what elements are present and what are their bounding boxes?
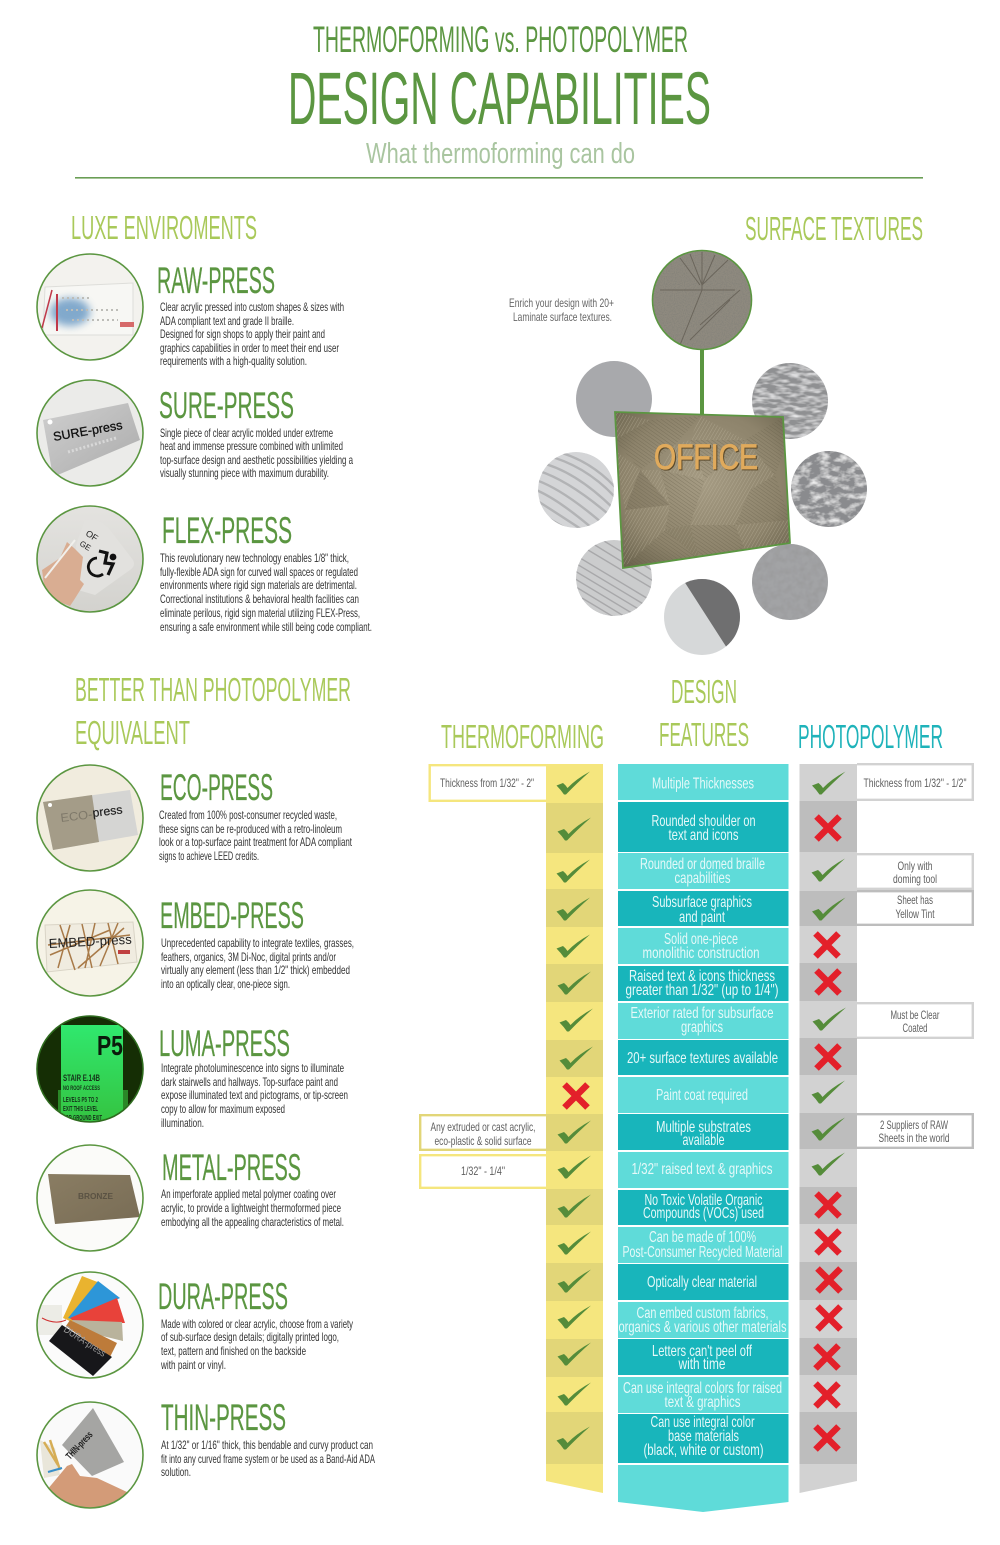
description: embed-press: virtually any element (less than 1/2" thick) embedded xyxy=(161,963,350,977)
name: metal-press: METAL-PRESS xyxy=(162,1147,301,1188)
check: subsurface graphics xyxy=(556,898,590,920)
feature: domed braille xyxy=(618,853,788,889)
description: embed-press: feathers, organics, 3M Di-Noc, digital prints and/or xyxy=(161,950,336,964)
callout: raw suppliers xyxy=(857,1114,973,1148)
feature: raised text thickness: Raised text & icons thickness xyxy=(629,968,775,985)
description: sure-press: visually stunning piece with maximum durability. xyxy=(160,466,329,480)
description: eco-press: look or a top-surface paint treatment for ADA compliant xyxy=(159,835,352,849)
feature: raised text thickness: greater than 1/32" (up to 1/4") xyxy=(626,982,778,999)
callout: thermoforming substrates: eco-plastic & solid surface xyxy=(434,1134,532,1148)
description: metal-press: acrylic, to provide a lightweight thermoformed piece xyxy=(161,1201,341,1215)
cross: integral colors xyxy=(816,1384,838,1406)
cross: one-piece xyxy=(816,934,838,956)
description: sure-press: Single piece of clear acrylic molded under extreme xyxy=(160,426,333,440)
check: multiple thicknesses xyxy=(556,772,590,794)
photo: embed-press xyxy=(36,890,144,998)
description: eco-press: these signs can be re-produced with a retro-linoleum xyxy=(159,822,342,836)
feature: raised graphics: 1/32" raised text & graphics xyxy=(632,1161,772,1178)
description: embed-press: Unprecedented capability to integrate textiles, grasses, xyxy=(161,936,354,950)
sign lettering: OFFICE xyxy=(654,438,758,477)
feature: recycled xyxy=(618,1227,788,1263)
callout: yellow tint: Sheet has xyxy=(897,893,933,907)
sign lettering shadow: OFFICE xyxy=(655,439,759,478)
check: rounded shoulder xyxy=(558,818,591,840)
column heading: design features xyxy=(659,673,749,753)
description: dura-press: Made with colored or clear acrylic, choose from a variety xyxy=(161,1317,353,1331)
feature: recycled: Post-Consumer Recycled Material xyxy=(622,1244,782,1261)
check: subsurface graphics xyxy=(812,898,846,920)
photo: luma-press: LEVELS P5 TO 2 xyxy=(63,1097,98,1104)
photo: luma-press: FOR GROUND EXIT xyxy=(63,1115,102,1122)
texture swatch: smooth two-tone xyxy=(664,578,742,655)
callout: thermoforming raised height: 1/32" - 1/4" xyxy=(461,1164,505,1178)
feature: integral base xyxy=(618,1414,788,1463)
description: metal-press xyxy=(161,1187,344,1229)
column: photopolymer xyxy=(800,764,973,1493)
product: flex-press xyxy=(36,505,372,634)
description: thin-press: fit into any curved frame system or be used as a Band-Aid ADA xyxy=(161,1452,375,1466)
description: eco-press: Created from 100% post-consumer recycled waste, xyxy=(159,808,337,822)
feature: rounded shoulder xyxy=(618,802,788,852)
feature: surface textures: 20+ surface textures available xyxy=(627,1050,778,1067)
feature: exterior rated xyxy=(618,1003,788,1039)
caption: surface textures: Enrich your design with 20+ xyxy=(509,296,614,310)
product: luma-press xyxy=(36,1015,348,1130)
name: thin-press: THIN-PRESS xyxy=(161,1397,286,1438)
cross: paint coat xyxy=(564,1084,588,1108)
check: multiple thicknesses xyxy=(812,772,846,794)
product: metal-press xyxy=(36,1144,344,1252)
feature: surface textures xyxy=(618,1040,788,1075)
callout: thermoforming substrates: Any extruded or cast acrylic, xyxy=(430,1120,536,1134)
check: exterior rated xyxy=(560,1008,593,1032)
heading: luxe environments: LUXE ENVIROMENTS xyxy=(71,209,257,246)
feature: no VOCs: No Toxic Volatile Organic xyxy=(644,1192,762,1209)
callout: doming tool: Only with xyxy=(898,859,932,873)
texture swatch: plain grey xyxy=(576,361,652,437)
feature: peel off: with time xyxy=(678,1356,726,1373)
photo: thin-press xyxy=(36,1401,144,1510)
check: one-piece xyxy=(556,934,590,958)
caption: surface textures: Laminate surface textures. xyxy=(513,310,612,324)
callout: clear coated: Must be Clear xyxy=(890,1008,940,1022)
feature: optically clear xyxy=(618,1264,788,1300)
photo: luma-press: NO ROOF ACCESS xyxy=(63,1085,100,1092)
heading: better than photopolymer xyxy=(75,671,351,751)
description: eco-press: signs to achieve LEED credits. xyxy=(159,849,259,863)
description: eco-press xyxy=(159,808,352,863)
photo: luma-press: STAIR E.14B xyxy=(63,1073,100,1083)
description: sure-press xyxy=(160,426,353,480)
product: eco-press xyxy=(36,764,352,872)
photo: metal-press: BRONZE xyxy=(78,1192,114,1201)
photo: flex-press xyxy=(36,505,144,613)
description: luma-press: copy to allow for maximum exposed xyxy=(161,1102,285,1116)
feature: domed braille: Rounded or domed braille xyxy=(640,856,765,873)
description: thin-press xyxy=(161,1438,375,1479)
photo: sure-press: SURE-press xyxy=(52,418,123,444)
feature: optically clear: Optically clear material xyxy=(647,1274,757,1291)
column: design features xyxy=(618,764,788,1512)
feature: integral colors: Can use integral colors for raised xyxy=(623,1380,782,1397)
feature: paint coat: Paint coat required xyxy=(656,1087,748,1104)
callout: raw suppliers: Sheets in the world xyxy=(878,1131,950,1145)
cross: no VOCs xyxy=(816,1194,840,1216)
callout: thermoforming thickness xyxy=(430,765,546,801)
check: exterior rated xyxy=(812,1008,846,1030)
description: flex-press: environments where rigid sign materials are detrimental. xyxy=(160,578,357,592)
check: paint coat xyxy=(812,1080,845,1104)
feature: paint coat xyxy=(618,1077,788,1113)
texture swatch: ripple xyxy=(752,363,828,439)
heading: better than photopolymer: EQUIVALENT xyxy=(75,714,190,751)
product: embed-press xyxy=(36,890,354,998)
description: thin-press: At 1/32" or 1/16" thick, this bendable and curvy product can xyxy=(161,1438,373,1452)
name: luma-press: LUMA-PRESS xyxy=(159,1023,290,1064)
feature: one-piece: Solid one-piece xyxy=(664,931,738,948)
check: optically clear xyxy=(558,1270,591,1292)
cross: embed fabrics xyxy=(818,1306,840,1330)
cross: integral base xyxy=(816,1426,838,1450)
feature: exterior rated: Exterior rated for subsurface xyxy=(630,1005,774,1022)
title block xyxy=(75,19,923,179)
callout: doming tool xyxy=(857,854,973,889)
texture swatch: wood grain xyxy=(576,540,652,616)
description: dura-press: with paint or vinyl. xyxy=(160,1358,226,1372)
description: flex-press: fully-flexible ADA sign for curved wall spaces or regulated xyxy=(160,565,358,579)
caption: surface textures xyxy=(509,296,614,324)
feature: multiple thicknesses: Multiple Thicknesses xyxy=(652,776,754,792)
feature: embed fabrics: Can embed custom fabrics, xyxy=(636,1305,768,1322)
callout: yellow tint: Yellow Tint xyxy=(896,907,935,921)
column heading: design features: FEATURES xyxy=(659,716,749,753)
feature: exterior rated: graphics xyxy=(681,1019,723,1036)
feature: recycled: Can be made of 100% xyxy=(649,1229,756,1246)
callout: clear coated: Coated xyxy=(902,1021,928,1035)
connector line xyxy=(700,349,704,415)
feature: raised graphics xyxy=(618,1152,788,1188)
name: eco-press: ECO-PRESS xyxy=(160,767,273,808)
description: flex-press: ensuring a safe environment while still being code compliant. xyxy=(160,620,372,634)
check: substrates xyxy=(558,1120,591,1144)
feature: subsurface graphics: and paint xyxy=(679,909,725,926)
name: embed-press: EMBED-PRESS xyxy=(160,895,304,936)
check: integral colors xyxy=(558,1382,591,1406)
office sign xyxy=(615,412,790,568)
description: raw-press: requirements with a high-quality solution. xyxy=(160,354,307,368)
photo: sure-press xyxy=(36,379,144,487)
description: dura-press: of sub-surface design details; digitally printed logo, xyxy=(161,1330,339,1344)
description: metal-press: embodying all the appealing characteristics of metal. xyxy=(161,1215,344,1229)
description: raw-press: Clear acrylic pressed into custom shapes & sizes with xyxy=(160,300,344,314)
photo: luma-press: P5 xyxy=(97,1030,123,1061)
cross: rounded shoulder xyxy=(816,816,840,840)
description: metal-press: An imperforate applied metal polymer coating over xyxy=(161,1187,336,1201)
texture swatch: pebbled xyxy=(752,544,828,620)
photo: flex-press: OF xyxy=(84,528,100,544)
description: flex-press: eliminate perilous, rigid sign material utilizing FLEX-Press, xyxy=(160,606,360,620)
photo: eco-press: press xyxy=(92,802,123,820)
feature: domed braille: capabilities xyxy=(674,870,730,887)
description: raw-press: ADA compliant text and grade II braille. xyxy=(160,314,294,328)
description: embed-press: into an optically clear, one-piece sign. xyxy=(161,977,290,991)
feature: peel off: Letters can't peel off xyxy=(652,1343,752,1360)
feature: no VOCs xyxy=(618,1190,788,1225)
name: dura-press: DURA-PRESS xyxy=(158,1276,288,1317)
callout: raw suppliers: 2 Suppliers of RAW xyxy=(880,1118,948,1132)
description: luma-press: expose illuminated text and pictograms, or tip-screen xyxy=(161,1088,348,1102)
panel: luxe environments xyxy=(36,209,372,634)
photo: raw-press xyxy=(36,253,144,361)
callout: thermoforming thickness: Thickness from 1/32" - 2" xyxy=(440,776,534,790)
cross: peel off xyxy=(816,1346,838,1368)
photo: eco-press xyxy=(36,764,144,872)
feature: one-piece xyxy=(618,928,788,964)
check: raised graphics xyxy=(558,1156,591,1178)
photo: dura-press xyxy=(36,1271,144,1379)
callout: clear coated xyxy=(857,1003,973,1038)
cross: recycled xyxy=(816,1230,840,1254)
check: integral base xyxy=(556,1426,590,1450)
panel: surface textures xyxy=(509,210,923,655)
feature: substrates: available xyxy=(682,1132,725,1149)
column heading: thermoforming: THERMOFORMING xyxy=(441,718,604,755)
feature: multiple thicknesses xyxy=(618,764,788,800)
feature: integral base: Can use integral color xyxy=(650,1414,755,1431)
check: substrates xyxy=(812,1118,845,1140)
feature: embed fabrics xyxy=(618,1302,788,1338)
callout: thermoforming raised height xyxy=(420,1155,546,1188)
feature: rounded shoulder: text and icons xyxy=(668,827,738,844)
description: flex-press xyxy=(160,551,372,634)
feature: integral colors xyxy=(618,1377,788,1413)
check: domed braille xyxy=(556,860,590,882)
photo: embed-press: EMBED-press xyxy=(48,932,133,951)
callout: thermoforming substrates xyxy=(420,1115,546,1150)
feature: raised text thickness xyxy=(618,966,788,1001)
name: flex-press: FLEX-PRESS xyxy=(162,510,292,551)
callout: doming tool: doming tool xyxy=(893,872,937,886)
check: surface textures xyxy=(560,1046,593,1070)
description: dura-press xyxy=(160,1317,353,1372)
feature: integral base: (black, white or custom) xyxy=(644,1442,764,1459)
subtitle: What thermoforming can do xyxy=(366,138,635,170)
photo: eco-press: ECO- xyxy=(60,807,93,825)
product: sure-press xyxy=(36,379,353,487)
photo: thin-press: THIN-press xyxy=(64,1429,96,1462)
photo: flex-press: GE xyxy=(78,539,93,553)
cross: raised text xyxy=(816,970,840,994)
check: recycled xyxy=(558,1232,591,1254)
description: thin-press: solution. xyxy=(161,1465,191,1479)
texture swatch: wavy stripes xyxy=(538,452,614,528)
cross: optically clear xyxy=(818,1268,840,1292)
check: no VOCs xyxy=(558,1194,591,1218)
check: raised graphics xyxy=(812,1152,845,1176)
feature: substrates xyxy=(618,1114,788,1150)
check: peel off xyxy=(558,1342,591,1366)
featured texture swatch xyxy=(652,250,752,350)
column: thermoforming xyxy=(420,764,603,1493)
description: luma-press: illumination. xyxy=(161,1116,204,1130)
check: raised text xyxy=(558,972,591,994)
feature: subsurface graphics xyxy=(618,891,788,926)
description: embed-press xyxy=(161,936,354,991)
photo: dura-press: DURA-press xyxy=(61,1324,108,1360)
description: raw-press: graphics capabilities in order to meet their end user xyxy=(160,341,339,355)
photo: luma-press: EXIT THIS LEVEL xyxy=(63,1106,98,1113)
callout: photopolymer thickness xyxy=(857,764,973,800)
feature: substrates: Multiple substrates xyxy=(656,1119,751,1136)
description: flex-press: Correctional institutions & behavioral health facilities can xyxy=(160,592,359,606)
texture swatch: stone xyxy=(791,451,867,527)
name: raw-press: RAW-PRESS xyxy=(157,260,275,301)
check: embed fabrics xyxy=(558,1306,591,1328)
feature: embed fabrics: organics & various other materials xyxy=(618,1319,786,1336)
column heading: design features: DESIGN xyxy=(671,673,737,710)
feature: subsurface graphics: Subsurface graphics xyxy=(652,894,752,911)
name: sure-press: SURE-PRESS xyxy=(159,385,294,426)
description: sure-press: heat and immense pressure combined with unlimited xyxy=(160,439,343,453)
feature: one-piece: monolithic construction xyxy=(642,945,760,962)
description: sure-press: top-surface design and aesthetic possibilities yielding a xyxy=(160,453,353,467)
panel: better than photopolymer xyxy=(36,671,375,1510)
feature: integral colors: text & graphics xyxy=(664,1394,740,1411)
description: luma-press xyxy=(161,1061,348,1130)
description: luma-press: Integrate photoluminescence into signs to illuminate xyxy=(161,1061,344,1075)
callout: yellow tint xyxy=(857,891,973,925)
feature: rounded shoulder: Rounded shoulder on xyxy=(652,813,756,830)
heading: better than photopolymer: BETTER THAN PHOTOPOLYMER xyxy=(75,671,351,708)
feature: peel off xyxy=(618,1339,788,1375)
description: raw-press: Designed for sign shops to apply their paint and xyxy=(160,327,325,341)
product: thin-press xyxy=(36,1397,375,1510)
feature: no VOCs: Compounds (VOCs) used xyxy=(643,1205,764,1222)
product: raw-press xyxy=(36,253,344,368)
check: domed braille xyxy=(812,858,845,882)
feature: integral base: base materials xyxy=(668,1428,739,1445)
description: dura-press: text, pattern and finished on the backside xyxy=(161,1344,306,1358)
description: flex-press: This revolutionary new technology enables 1/8" thick, xyxy=(160,551,349,565)
photo: luma-press xyxy=(36,1015,144,1126)
product: dura-press xyxy=(36,1271,353,1379)
description: raw-press xyxy=(160,300,344,368)
description: luma-press: dark stairwells and hallways. Top-surface paint and xyxy=(161,1075,338,1089)
photo: metal-press xyxy=(36,1144,144,1252)
cross: surface textures xyxy=(816,1046,840,1068)
panel: comparison table xyxy=(420,673,973,1512)
